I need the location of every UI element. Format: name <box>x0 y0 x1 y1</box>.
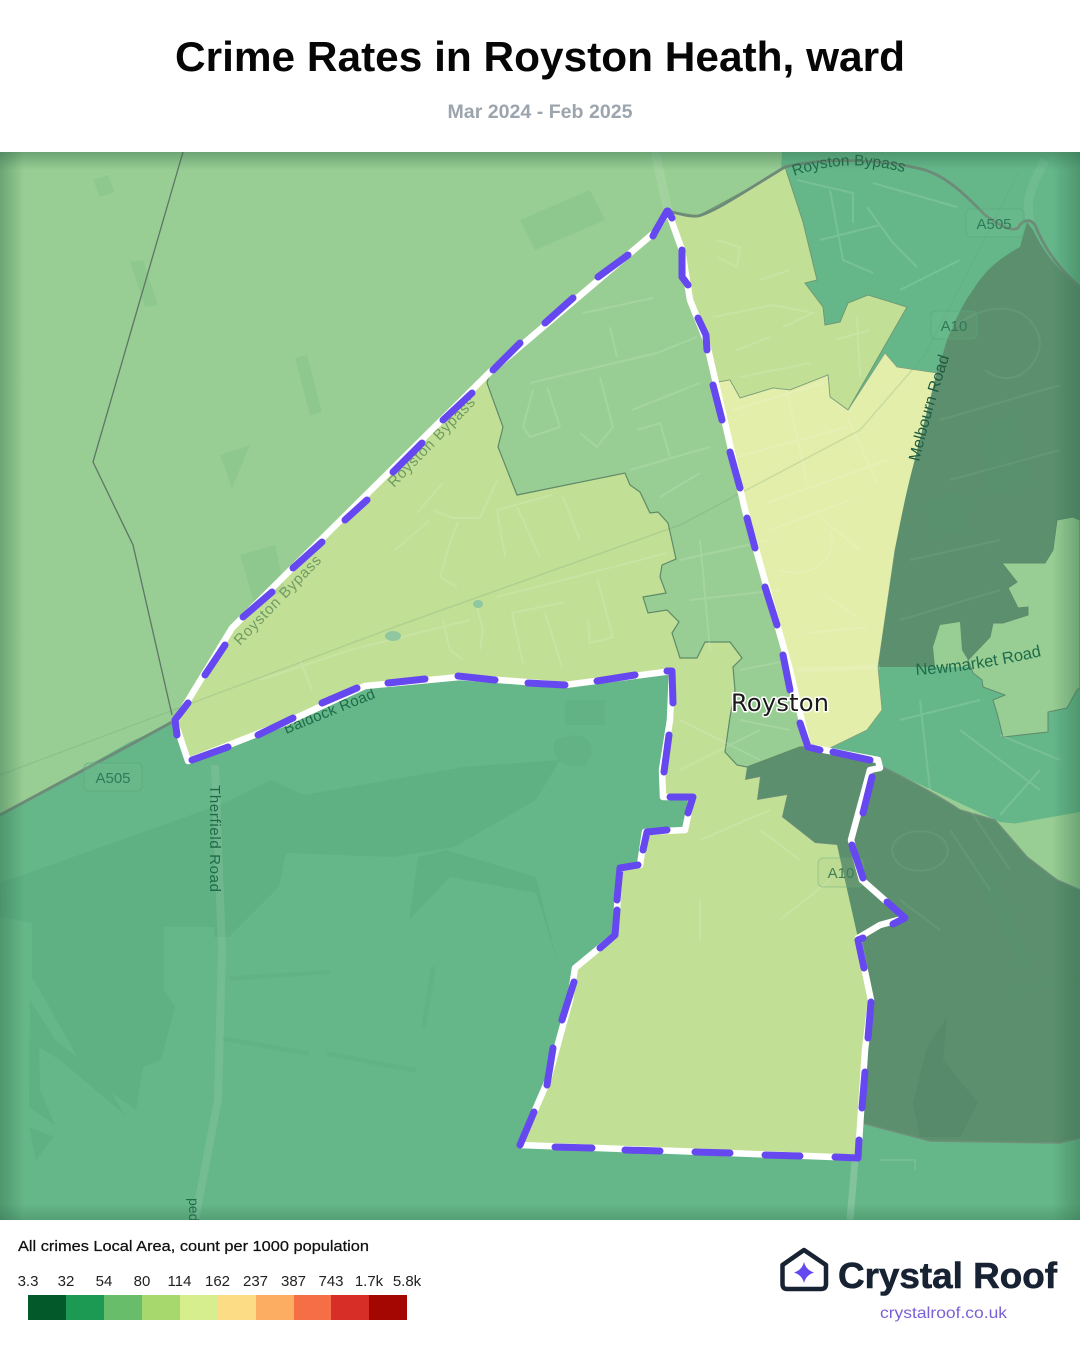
label: Royston Bypass diagonal lower: Royston Bypass <box>231 552 325 649</box>
small ponds <box>385 600 483 641</box>
subtitle: date range: Mar 2024 - Feb 2025 <box>448 102 633 123</box>
label: A505 north-east shield <box>966 209 1024 237</box>
ward boundary: purple dashes <box>175 211 905 1158</box>
legend tick labels: 80 <box>134 1273 150 1290</box>
area: woodland shading <box>0 760 560 1160</box>
area: south-east mid green <box>1016 812 1080 830</box>
brand name: Crystal Roof <box>838 1255 1058 1296</box>
area: north-east housing <box>781 152 1080 396</box>
legend tick labels: 32 <box>58 1273 74 1290</box>
label: A10 north shield <box>931 311 977 339</box>
legend tick labels: 237 <box>243 1273 268 1290</box>
area: south-east dark <box>745 747 1080 1143</box>
choropleth map <box>0 152 1080 1220</box>
label: Newmarket Road: Newmarket Road <box>916 644 1041 675</box>
brand logo <box>782 1250 1058 1322</box>
west parish line <box>93 152 183 715</box>
area: south-west fields <box>0 671 1080 1220</box>
road labels <box>84 154 1041 1220</box>
area: ward mid-green district <box>487 215 808 767</box>
label: A505 west shield <box>84 763 142 791</box>
area: north lime <box>668 167 907 410</box>
map base: north-west area <box>0 152 1016 825</box>
railway line <box>6 370 913 773</box>
legend <box>18 1238 422 1320</box>
outer boundary road <box>0 161 1080 815</box>
area: north-east dark <box>878 222 1080 667</box>
legend tick labels: 387 <box>281 1273 306 1290</box>
label: A505 west shield: A505 <box>95 770 131 787</box>
area: east pale-green Newmarket <box>968 517 1080 737</box>
area: pale central Royston <box>712 353 937 748</box>
brand url: crystalroof.co.uk <box>880 1305 1008 1322</box>
label: A10 north shield: A10 <box>941 318 967 335</box>
legend tick labels: 3.3 <box>18 1273 38 1290</box>
label: Therfield Road: Therfield Road <box>206 785 223 892</box>
icon: house with sparkle <box>782 1250 826 1289</box>
label: A505 north-east shield: A505 <box>976 216 1012 233</box>
map edge vignette <box>0 152 1080 1220</box>
legend tick labels: 5.8k <box>393 1273 422 1290</box>
legend tick labels: 54 <box>96 1273 112 1290</box>
ward boundary: white casing <box>175 211 905 1158</box>
label: Baldock Road: Baldock Road <box>281 686 377 738</box>
area: east Newmarket Road green <box>831 667 1080 824</box>
legend tick labels <box>18 1273 422 1290</box>
place label: Royston: Royston <box>731 689 829 717</box>
area: south-east woodland blob <box>913 1017 978 1137</box>
label: A10 south shield: A10 <box>828 865 854 882</box>
legend tick labels: 743 <box>318 1273 344 1290</box>
label: partial road at bottom: ped <box>186 1198 202 1221</box>
title: Crime Rates in Royston Heath, ward <box>175 33 905 80</box>
legend colour scale <box>28 1295 407 1320</box>
label: Royston Bypass north: Royston Bypass <box>792 154 905 176</box>
area: ward lime fill <box>178 379 868 1154</box>
street network <box>195 152 1060 1220</box>
label: A10 south shield <box>818 858 864 887</box>
label: Melbourn Road: Melbourn Road <box>908 354 949 461</box>
legend title: All crimes Local Area, count per 1000 population <box>18 1238 369 1255</box>
legend tick labels: 162 <box>205 1273 230 1290</box>
field shadows <box>94 176 604 601</box>
label: Royston Bypass diagonal upper: Royston Bypass <box>385 394 479 491</box>
legend tick labels: 114 <box>168 1273 191 1290</box>
legend tick labels: 1.7k <box>355 1273 384 1290</box>
